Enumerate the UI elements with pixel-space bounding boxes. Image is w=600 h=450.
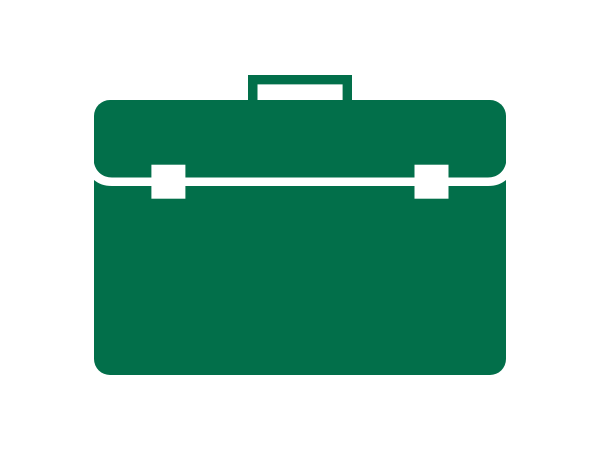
briefcase body xyxy=(94,100,506,375)
white strap xyxy=(94,163,506,186)
right clasp xyxy=(414,165,448,199)
briefcase handle xyxy=(248,75,352,101)
left clasp xyxy=(151,165,185,199)
